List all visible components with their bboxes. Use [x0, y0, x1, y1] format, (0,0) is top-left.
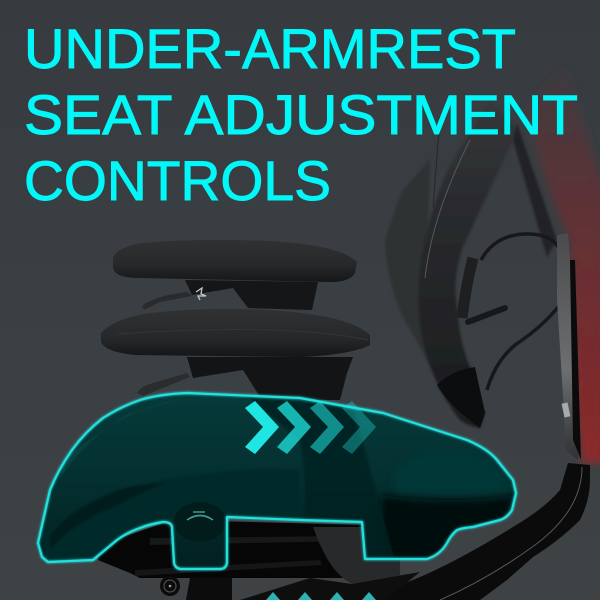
direction chevrons [245, 401, 376, 454]
red chair back [410, 70, 600, 463]
lower armrest [101, 309, 370, 400]
backrest strut [513, 123, 557, 257]
seat cushion highlighted [38, 393, 516, 569]
base block [186, 578, 232, 600]
upper armrest [113, 240, 357, 310]
teal base markers [266, 592, 376, 600]
seat outline glow [38, 393, 516, 569]
title [24, 17, 578, 212]
curved base frame [383, 463, 590, 600]
caster wheel [160, 576, 180, 596]
title: UNDER-ARMREST [24, 17, 516, 80]
cable loop and lever [462, 234, 564, 390]
title: CONTROLS [24, 149, 331, 212]
post and red frame joint [557, 233, 581, 460]
backrest mesh and cushion [385, 100, 517, 428]
title: SEAT ADJUSTMENT [24, 83, 578, 146]
lower chassis [98, 520, 420, 600]
